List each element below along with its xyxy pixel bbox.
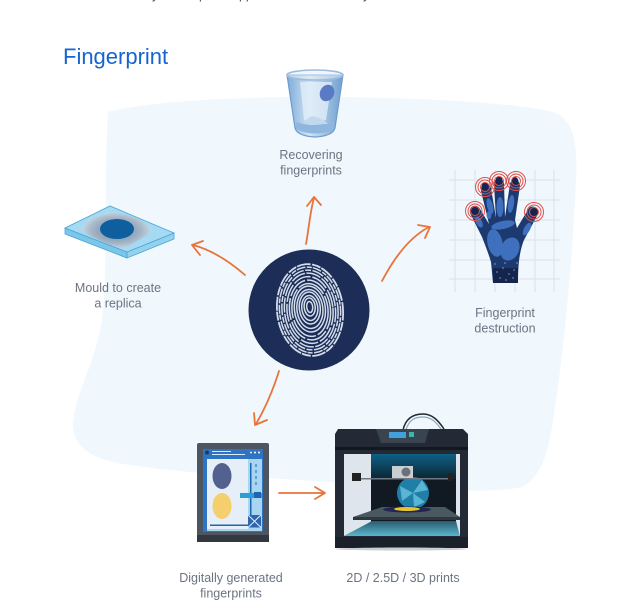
arrow: tablet to printer (279, 487, 325, 499)
label: digitally generated fingerprints: fingerprints (200, 586, 262, 600)
icon: hand with grid (449, 170, 560, 292)
label: mould to create a replica: a replica (94, 296, 142, 310)
label: mould to create a replica: Mould to create (75, 281, 161, 295)
arrow: to tablet (254, 371, 279, 425)
background blob (73, 97, 576, 491)
icon: glass with fingerprint (287, 70, 343, 137)
icon: tablet (197, 443, 269, 542)
hand silhouette (470, 179, 538, 283)
label: recovering fingerprints: Recovering (279, 148, 343, 162)
label: 2D / 2.5D / 3D prints: 2D / 2.5D / 3D prints (346, 571, 460, 585)
label: recovering fingerprints: fingerprints (280, 164, 342, 178)
label: fingerprint destruction: Fingerprint (475, 306, 535, 320)
arrow: to hand (382, 225, 430, 281)
label: fingerprint destruction: destruction (474, 322, 536, 336)
central fingerprint circle (248, 250, 370, 370)
title: Fingerprint (63, 44, 168, 69)
arrow: to mould (192, 241, 245, 275)
label: digitally generated fingerprints: Digitally generated (179, 571, 283, 585)
arrow: to glass (306, 197, 321, 244)
icon: 3D printer (335, 414, 468, 550)
icon: mould (65, 206, 174, 258)
